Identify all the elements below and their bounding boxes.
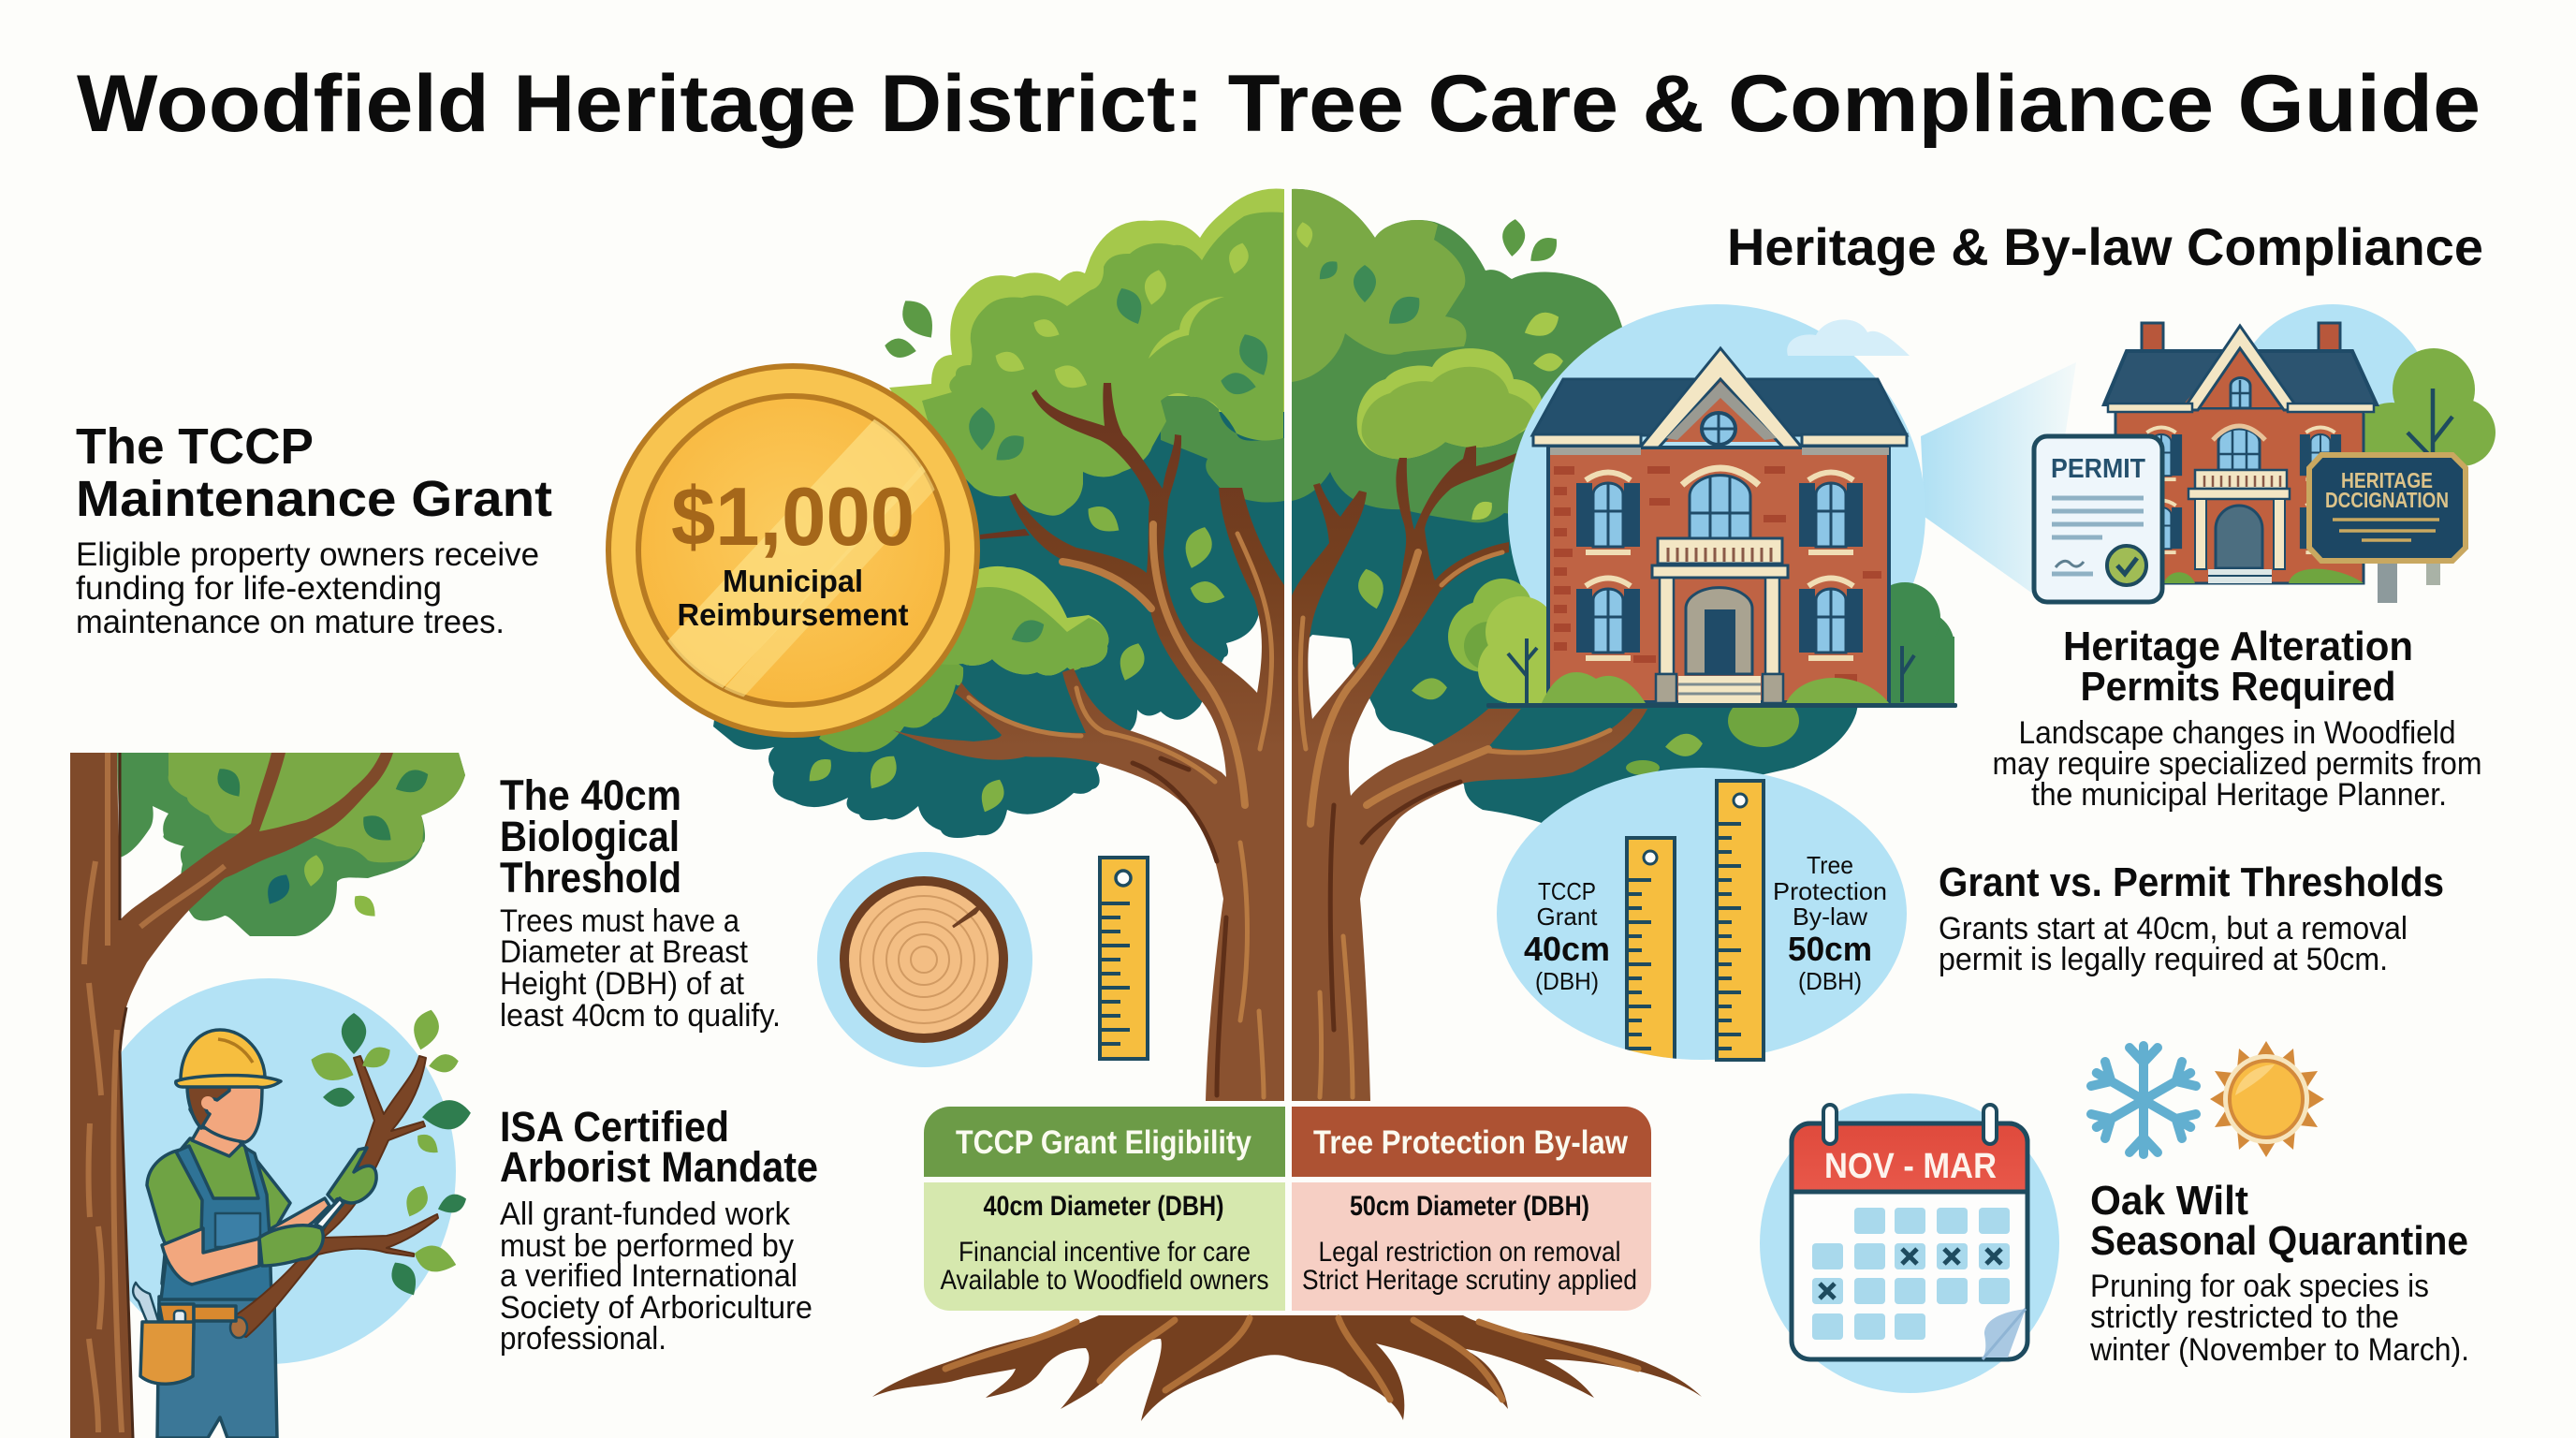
tree trunk and branches right — [1292, 446, 1647, 1101]
icon: sun — [2210, 1041, 2324, 1157]
table: by-law column: Legal restriction on removal — [1318, 1237, 1621, 1268]
text block: ISA certified arborist mandate: a verified International — [500, 1258, 798, 1294]
calendar cells — [1812, 1208, 2010, 1340]
text block: ISA certified arborist mandate: professional. — [500, 1321, 666, 1357]
text block: TCCP maintenance grant: funding for life-extending — [76, 570, 442, 607]
icon: snowflake — [2089, 1046, 2198, 1154]
icon: calendar NOV - MAR: NOV - MAR — [1824, 1147, 1997, 1186]
label: by-law 50cm: Tree — [1807, 851, 1853, 879]
text block: 40cm biological threshold: Biological — [500, 813, 680, 860]
text block: 40cm biological threshold: Height (DBH) of at — [500, 966, 745, 1002]
text block: oak wilt seasonal quarantine: winter (November to March). — [2089, 1332, 2469, 1368]
table: grant column — [924, 1107, 1285, 1311]
text block: oak wilt seasonal quarantine: Pruning for oak species is — [2090, 1269, 2429, 1304]
label: TCCP grant 40cm: Grant — [1537, 902, 1598, 931]
heritage designation sign: DCCIGNATION — [2325, 488, 2449, 512]
text block: grant vs permit thresholds: Grants start at 40cm, but a removal — [1939, 911, 2408, 946]
text block: heritage alteration permits: Heritage Alteration — [2063, 624, 2413, 669]
text block: grant vs permit thresholds: Grant vs. Permit Thresholds — [1939, 859, 2444, 905]
house backdrop — [1508, 304, 1925, 607]
text block: heritage alteration permits: Landscape changes in Woodfield — [2018, 715, 2456, 751]
text block: ISA certified arborist mandate: Society of Arboriculture — [500, 1290, 812, 1326]
label: TCCP grant 40cm: TCCP — [1538, 877, 1596, 905]
text block: ISA certified arborist mandate — [500, 1103, 818, 1357]
title: Woodfield Heritage District: Tree Care & Compliance Guide — [77, 59, 2481, 149]
round window — [1702, 413, 1735, 445]
table: grant column: TCCP Grant Eligibility — [956, 1124, 1251, 1161]
small tree — [2354, 348, 2496, 477]
icon: small ruler — [1100, 858, 1148, 1059]
text block: grant vs permit thresholds — [1939, 859, 2444, 977]
table: by-law column: 50cm Diameter (DBH) — [1350, 1191, 1589, 1222]
label: TCCP grant 40cm: 40cm — [1524, 930, 1610, 968]
coin: $1,000 municipal reimbursement — [608, 366, 977, 735]
text block: ISA certified arborist mandate: All grant-funded work — [500, 1196, 791, 1232]
windows — [1576, 468, 1863, 661]
text block: 40cm biological threshold — [500, 771, 781, 1034]
text block: oak wilt seasonal quarantine: Oak Wilt — [2090, 1178, 2248, 1224]
diagram: grant vs permit rulers — [1497, 768, 1907, 1081]
tree trunk and branches left — [893, 383, 1284, 1101]
tree canopy right half — [1292, 189, 1858, 824]
label: by-law 50cm: Protection — [1773, 877, 1887, 905]
table: by-law column: Strict Heritage scrutiny applied — [1302, 1265, 1637, 1296]
text block: oak wilt seasonal quarantine: strictly restricted to the — [2090, 1299, 2399, 1335]
text block: 40cm biological threshold: least 40cm to qualify. — [500, 998, 781, 1034]
ground line — [1486, 703, 1957, 708]
illustration: arborist at tree — [70, 753, 472, 1438]
label: by-law 50cm: (DBH) — [1798, 967, 1862, 995]
illustration: permit, small house and designation sign — [2034, 304, 2496, 603]
coin: $1,000 municipal reimbursement: Municipal — [723, 564, 863, 598]
icon: tree log cross-section — [817, 852, 1032, 1067]
label: by-law 50cm — [1773, 851, 1887, 995]
permit card — [2034, 436, 2162, 602]
walls — [1548, 448, 1889, 702]
side tree canopy — [117, 753, 465, 936]
tree roots — [872, 1315, 1702, 1421]
text block: 40cm biological threshold: Diameter at Breast — [500, 934, 749, 970]
table: grant column: 40cm Diameter (DBH) — [983, 1191, 1224, 1222]
table: grant column: Financial incentive for care — [959, 1237, 1251, 1268]
base shrubs — [1542, 672, 1889, 703]
ruler: 40cm — [1627, 838, 1675, 1081]
cloud — [1787, 319, 1910, 356]
table: grant column: Available to Woodfield owners — [940, 1265, 1269, 1296]
text block: TCCP maintenance grant: Eligible property owners receive — [76, 536, 539, 573]
text block: heritage alteration permits: the municipal Heritage Planner. — [2031, 777, 2447, 813]
heading: heritage and by-law compliance: Heritage & By-law Compliance — [1727, 217, 2483, 276]
tree canopy left half — [713, 189, 1284, 838]
coin: $1,000 municipal reimbursement: Reimbursement — [678, 597, 909, 632]
coin: $1,000 municipal reimbursement: $1,000 — [671, 470, 915, 563]
bushes — [1448, 579, 1954, 704]
heritage designation sign — [2309, 455, 2466, 603]
ruler: 50cm — [1717, 781, 1764, 1060]
illustration: heritage house — [1448, 304, 1957, 722]
side tree trunk and branch — [70, 753, 393, 1438]
text block: oak wilt seasonal quarantine: Seasonal Quarantine — [2090, 1218, 2468, 1264]
callout beam from house to vignette — [1921, 362, 2076, 599]
central tree illustration — [713, 183, 1858, 1421]
heritage designation sign: HERITAGE — [2341, 468, 2433, 492]
text block: ISA certified arborist mandate: must be performed by — [500, 1228, 794, 1264]
text block: TCCP maintenance grant — [76, 418, 552, 640]
label: TCCP grant 40cm — [1524, 877, 1610, 995]
text block: TCCP maintenance grant: Maintenance Grant — [76, 471, 552, 527]
small house — [2104, 323, 2377, 583]
text block: 40cm biological threshold: Trees must have a — [500, 903, 739, 939]
text block: ISA certified arborist mandate: ISA Certified — [500, 1103, 729, 1151]
text block: TCCP maintenance grant: The TCCP — [76, 418, 314, 475]
label: by-law 50cm: 50cm — [1788, 930, 1872, 968]
text block: TCCP maintenance grant: maintenance on mature trees. — [76, 604, 505, 640]
blue backdrop — [122, 978, 456, 1364]
table: by-law column: Tree Protection By-law — [1313, 1124, 1629, 1161]
comparison table — [924, 1107, 1651, 1311]
text block: 40cm biological threshold: Threshold — [500, 854, 681, 902]
text block: oak wilt seasonal quarantine — [2089, 1178, 2469, 1368]
arborist leaves — [307, 1006, 472, 1300]
roof — [1532, 379, 1907, 435]
vignette backdrop — [2233, 304, 2432, 503]
text block: grant vs permit thresholds: permit is legally required at 50cm. — [1939, 942, 2388, 977]
text block: ISA certified arborist mandate: Arborist Mandate — [500, 1143, 818, 1191]
text block: 40cm biological threshold: The 40cm — [500, 771, 681, 819]
leaves — [803, 218, 1704, 816]
text block: heritage alteration permits: Permits Required — [2080, 664, 2396, 710]
arborist figure — [133, 1030, 438, 1438]
icon: calendar NOV - MAR — [1760, 1093, 2059, 1393]
label: TCCP grant 40cm: (DBH) — [1535, 967, 1599, 995]
permit card: PERMIT — [2051, 454, 2145, 484]
text block: heritage alteration permits: may require specialized permits from — [1992, 746, 2482, 782]
tree divider — [1284, 183, 1292, 1106]
text block: heritage alteration permits — [1992, 624, 2482, 813]
table: by-law column — [1292, 1107, 1651, 1311]
label: by-law 50cm: By-law — [1793, 902, 1867, 931]
balcony and porch — [1652, 538, 1788, 703]
